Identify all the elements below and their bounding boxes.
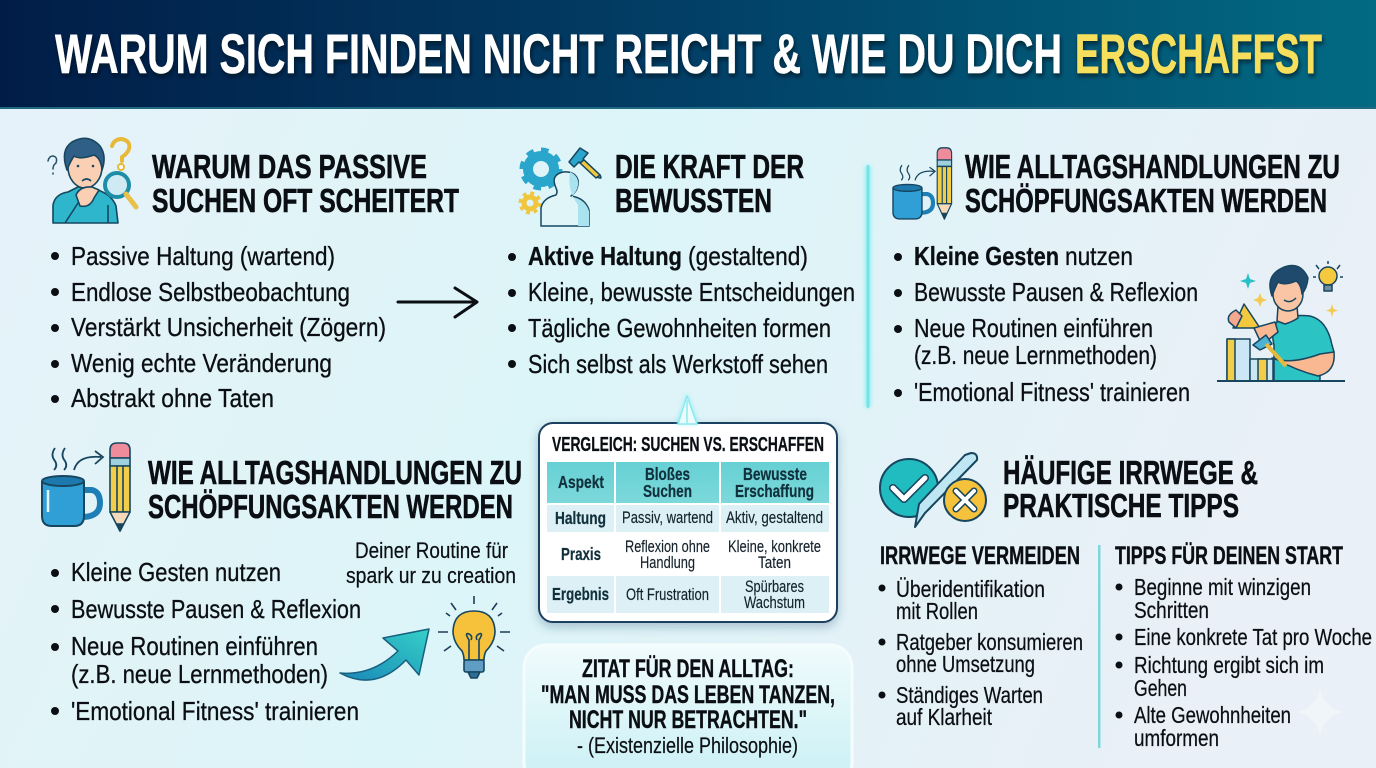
column: tipps fuer deinen start: Alte Gewohnheiten [1134,702,1291,728]
bullet list: (z.B. neue Lernmethoden) [914,340,1157,370]
bullet list [894,241,1198,407]
decorative sparkle [1296,688,1344,736]
heading: PRAKTISCHE TIPPS [1003,487,1239,524]
table: Praxis [561,544,601,564]
table: Erschaffung [735,481,814,501]
quote box [524,645,852,768]
panel: alltagshandlungen links [42,443,522,726]
heading [148,454,522,525]
heading: HÄUFIGE IRRWEGE & [1003,454,1258,491]
table: Ergebnis [552,584,609,604]
table: Taten [758,554,791,572]
quote text: - (Existenzielle Philosophie) [577,733,798,758]
bullet list: Bewusste Pausen & Reflexion [71,594,361,624]
quote text: NICHT NUR BETRACHTEN." [569,706,807,734]
bullet list: nutzen [1065,241,1133,271]
table: Bewusste [743,464,807,484]
bullet list: Kleine, bewusste Entscheidungen [528,277,855,307]
column: tipps fuer deinen start: Gehen [1134,675,1187,701]
bullet list: 'Emotional Fitness' trainieren [914,377,1190,407]
caption above bulb: spark ur zu creation [346,563,516,588]
heading [1003,454,1258,524]
icon: light bulb [438,596,510,678]
bullet list: Aktive Haltung [528,241,682,271]
heading: WIE ALLTAGSHANDLUNGEN ZU [148,454,522,491]
caption above bulb [346,538,516,588]
column: irrwege vermeiden: ohne Umsetzung [896,651,1035,677]
card title: VERGLEICH: SUCHEN VS. ERSCHAFFEN [552,434,824,456]
bullet list: Verstärkt Unsicherheit (Zögern) [71,312,386,342]
table: Aspekt [558,472,604,492]
panel: alltagshandlungen rechts [893,148,1345,407]
icon: mug and pencil [893,148,952,219]
table: Oft Frustration [626,586,709,604]
icon: gears, hammer and person [520,148,601,226]
header banner [0,0,1376,109]
table: Wachstum [744,594,805,612]
heading: WARUM DAS PASSIVE [152,148,427,185]
table: Passiv, wartend [622,509,713,527]
bullet list: Neue Routinen einführen [914,313,1153,343]
bullet list: Abstrakt ohne Taten [71,383,274,413]
column: tipps fuer deinen start: Richtung ergibt sich im [1134,652,1324,678]
bullet list [51,557,361,726]
bullet list: (gestaltend) [688,241,808,271]
column: irrwege vermeiden: auf Klarheit [896,704,992,730]
table [547,462,829,613]
column: tipps fuer deinen start: Schritten [1134,597,1209,623]
heading [615,148,804,219]
heading [152,148,459,219]
table: Kleine, konkrete [728,538,821,556]
icon: check and cross [880,453,986,527]
bullet list [51,241,386,413]
column: irrwege vermeiden: Überidentifikation [896,576,1045,602]
quote text: "MAN MUSS DAS LEBEN TANZEN, [541,681,835,709]
bullet list: Kleine Gesten [914,241,1059,271]
icon: thinking person with magnifier [48,138,136,223]
illustration: man building with hammer [1217,261,1345,381]
column: irrwege vermeiden [878,542,1083,730]
arrow: from searching to creating [398,288,477,317]
panel: warum das passive suchen scheitert [48,138,459,413]
bullet list: 'Emotional Fitness' trainieren [71,696,359,726]
bullet list: Sich selbst als Werkstoff sehen [528,349,828,379]
column: irrwege vermeiden: Ständiges Warten [896,682,1043,708]
bullet list: Kleine Gesten nutzen [71,557,281,587]
table: Spürbares [745,578,804,596]
column: irrwege vermeiden: Ratgeber konsumieren [896,629,1083,655]
caption above bulb: Deiner Routine für [355,538,508,563]
heading [965,148,1340,219]
table: Haltung [555,508,606,528]
bullet list: Neue Routinen einführen [71,631,318,661]
column: irrwege vermeiden: IRRWEGE VERMEIDEN [880,542,1080,570]
table: Handlung [640,554,695,572]
panel: die kraft der bewussten [508,148,855,379]
icon: mug and pencil [42,443,130,531]
comparison table card [539,393,837,622]
bullet list: Wenig echte Veränderung [71,348,332,378]
table: Suchen [643,481,692,501]
table: Bloßes [645,464,690,484]
table: Reflexion ohne [625,538,710,556]
column: tipps fuer deinen start [1115,541,1372,751]
bullet list: Passive Haltung (wartend) [71,241,335,271]
heading: DIE KRAFT DER [615,148,804,185]
column: tipps fuer deinen start: Beginne mit winzigen [1134,574,1311,600]
heading: BEWUSSTEN [615,182,772,219]
heading: SCHÖPFUNGSAKTEN WERDEN [148,488,513,525]
bullet list [508,241,855,379]
bullet list: (z.B. neue Lernmethoden) [71,659,328,689]
callout pointer [676,393,699,424]
quote text [541,654,835,758]
glowing vertical divider [865,165,871,408]
column divider [1098,545,1100,748]
arrow: teal curved up [340,629,429,680]
table: Aktiv, gestaltend [726,509,823,527]
column: tipps fuer deinen start: umformen [1134,725,1219,751]
panel: haeufige irrwege und praktische tipps [878,453,1372,751]
card [539,423,837,622]
heading: SUCHEN OFT SCHEITERT [152,182,459,219]
bullet list: Bewusste Pausen & Reflexion [914,277,1198,307]
quote text: ZITAT FÜR DEN ALLTAG: [582,654,794,683]
column: irrwege vermeiden: mit Rollen [896,598,978,624]
bullet list: Tägliche Gewohnheiten formen [528,313,831,343]
bullet list: Endlose Selbstbeobachtung [71,277,350,307]
